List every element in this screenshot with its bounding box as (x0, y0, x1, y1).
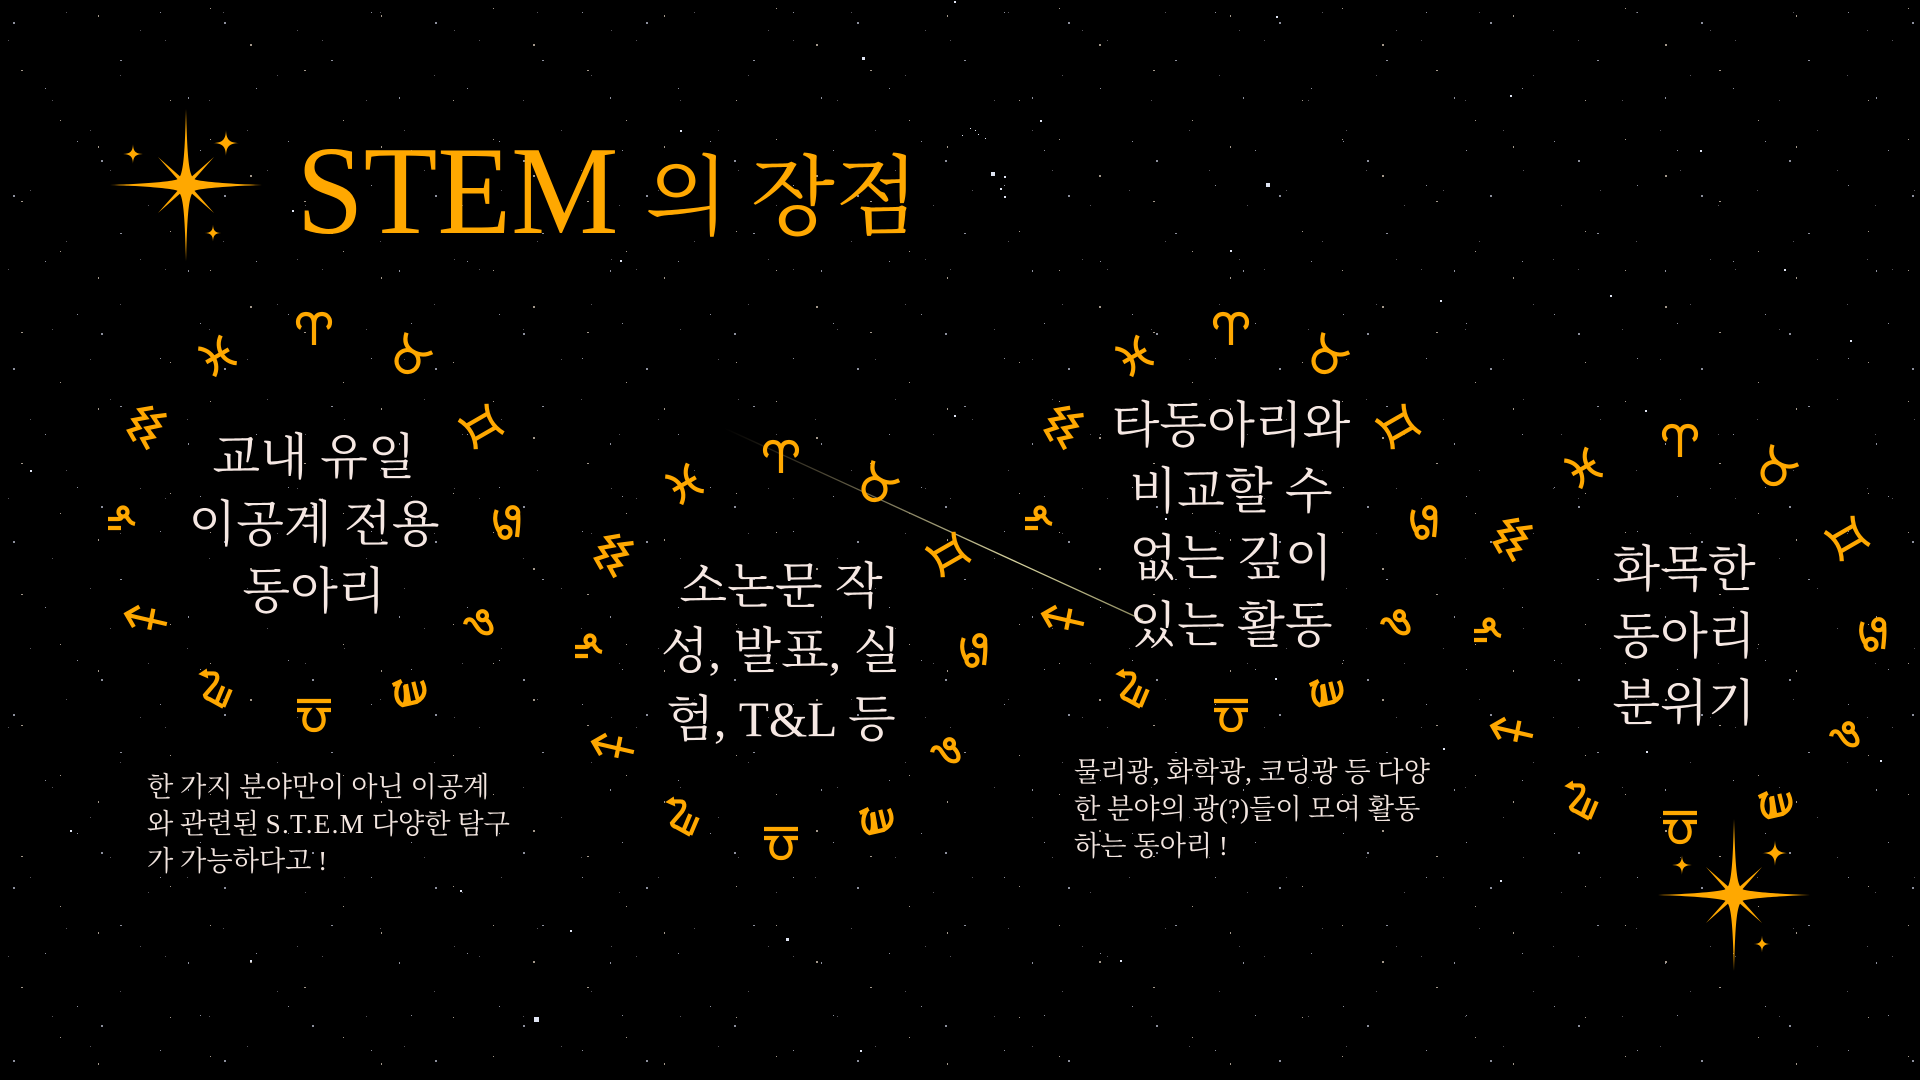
title (296, 122, 919, 261)
icon: sparkle top left (110, 109, 262, 261)
text block: description left: 한 가지 분야만이 아닌 이공계 (147, 772, 489, 802)
heading: advantage 4: 동아리 (1612, 609, 1756, 664)
heading: advantage 4: 화목한 (1612, 542, 1756, 597)
heading: advantage 2: 성, 발표, 실 (661, 624, 901, 679)
meteor streak (724, 428, 1143, 620)
text block: description middle: 한 분야의 광(?)들이 모여 활동 (1074, 794, 1420, 824)
text block: description middle: 물리광, 화학광, 코딩광 등 다양 (1074, 757, 1431, 787)
zodiac wheel 3 (1025, 314, 1435, 730)
text block: description left (147, 772, 510, 876)
heading: advantage 1: 교내 유일 (212, 430, 416, 485)
title: STEM (296, 122, 618, 261)
heading: advantage 2 (661, 559, 901, 747)
heading: advantage 4: 분위기 (1612, 676, 1756, 731)
heading: advantage 1 (189, 430, 439, 619)
icon: sparkle bottom right (1658, 819, 1810, 971)
text block: description left: 가 가능하다고 ! (147, 846, 327, 876)
heading: advantage 3 (1112, 398, 1351, 653)
zodiac wheel 1 (108, 314, 518, 730)
title: 의 장점 (645, 149, 919, 246)
heading: advantage 3: 비교할 수 (1129, 464, 1333, 519)
text block: description middle: 하는 동아리 ! (1074, 831, 1228, 861)
heading: advantage 3: 있는 활동 (1129, 598, 1333, 653)
heading: advantage 3: 없는 깊이 (1129, 531, 1333, 586)
heading: advantage 2: 험, T&L 등 (666, 692, 896, 747)
heading: advantage 2: 소논문 작 (679, 559, 883, 614)
text block: description left: 와 관련된 S.T.E.M 다양한 탐구 (147, 809, 510, 839)
heading: advantage 3: 타동아리와 (1112, 398, 1351, 453)
heading: advantage 4 (1612, 542, 1756, 731)
heading: advantage 1: 이공계 전용 (189, 497, 439, 552)
text block: description middle (1074, 757, 1431, 861)
zodiac wheel 2 (575, 442, 985, 858)
heading: advantage 1: 동아리 (242, 564, 386, 619)
zodiac wheel 4 (1474, 426, 1884, 842)
